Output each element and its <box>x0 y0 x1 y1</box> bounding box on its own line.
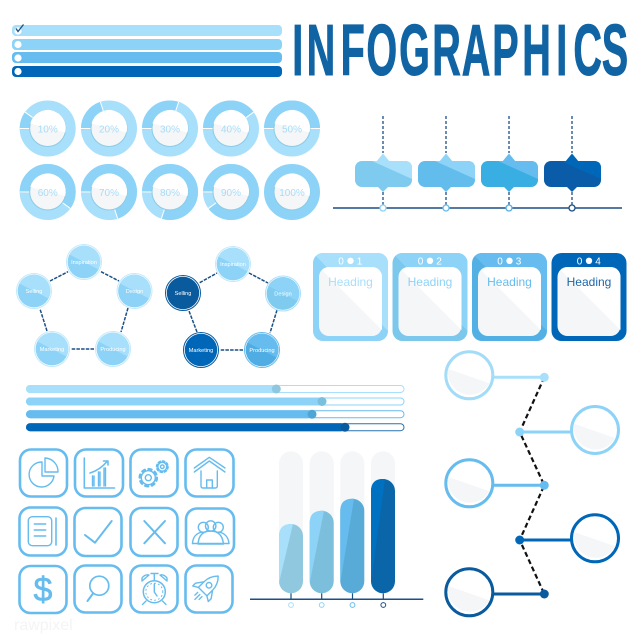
slider 2 <box>26 397 404 406</box>
donut 20% <box>81 102 132 152</box>
connectors <box>40 272 128 349</box>
milestone 3 <box>446 460 549 507</box>
card 1: Heading <box>328 275 373 289</box>
panel: cycle diagram left <box>16 244 152 366</box>
donut 10% <box>20 106 71 152</box>
timeline tag 1 <box>355 116 412 211</box>
icon: team <box>186 508 234 556</box>
card 4: Heading <box>567 275 611 289</box>
icon: rocket <box>186 566 232 612</box>
card 3: Heading <box>487 275 532 289</box>
donut 40%: 40% <box>221 124 241 135</box>
icon: pie chart <box>20 450 67 496</box>
donut 50%: 50% <box>282 124 302 135</box>
node: Selling: Selling <box>175 291 191 297</box>
donut 100%: 100% <box>279 188 305 199</box>
timeline tag 3 <box>481 116 538 211</box>
node: Producing: Producing <box>249 348 275 354</box>
node: Design: Design <box>274 292 292 298</box>
donut 80%: 80% <box>160 188 180 199</box>
donut 30% <box>142 102 193 152</box>
node: Marketing: Marketing <box>40 347 64 353</box>
card 1 <box>313 253 388 341</box>
node: Producing: Producing <box>100 347 126 353</box>
icon: gears <box>130 450 178 496</box>
card 1: 0 <box>338 256 344 267</box>
slider 1 <box>26 384 404 394</box>
timeline tag 2 <box>418 116 475 211</box>
donut 20%: 20% <box>99 124 119 135</box>
donut 50% <box>264 106 320 152</box>
title: INFOGRAPHICS <box>292 11 628 91</box>
icon: check <box>74 508 122 556</box>
card 1: 1 <box>357 256 363 267</box>
panel: heading cards <box>313 253 626 341</box>
donut 70% <box>81 169 132 219</box>
milestone 5 <box>446 569 549 616</box>
slider 3 <box>26 410 404 419</box>
icon: dollar: $ <box>34 571 53 609</box>
node: Marketing: Marketing <box>189 348 213 354</box>
donut 40% <box>203 106 254 152</box>
card 4: 0 <box>577 256 583 267</box>
watermark: rawpixel: rawpixel <box>14 617 73 634</box>
dashed zigzag path <box>520 377 544 594</box>
connectors <box>189 273 277 350</box>
donut 90%: 90% <box>221 188 241 199</box>
card 3 <box>472 253 547 341</box>
card 3: 0 <box>497 256 503 267</box>
node: Design: Design <box>126 289 143 295</box>
donut 80% <box>142 169 193 219</box>
node: Inspiration: Inspiration <box>71 260 97 266</box>
donut 30%: 30% <box>160 124 180 135</box>
card 2 <box>392 253 468 341</box>
bar 2 <box>310 451 334 607</box>
icon: magnifier <box>74 566 122 612</box>
card 4: 4 <box>595 256 601 267</box>
bar 4 <box>12 66 282 77</box>
panel: zigzag milestones <box>446 352 618 616</box>
bar 3 <box>12 52 282 63</box>
card 3: 3 <box>516 256 522 267</box>
icon: document <box>20 508 66 556</box>
panel: icon grid <box>20 450 234 613</box>
milestone 1 <box>446 352 549 399</box>
bar 2 <box>12 39 282 50</box>
slider 4 <box>26 423 404 432</box>
donut 100% <box>269 169 315 215</box>
bar 1 <box>279 451 303 607</box>
icon: dollar <box>20 566 66 613</box>
bar 4 <box>371 451 395 607</box>
icon: cross <box>130 508 178 556</box>
bar 1 with check <box>12 24 282 36</box>
icon: house <box>186 450 234 496</box>
icon: growth chart <box>75 450 123 496</box>
card 2: 2 <box>436 256 442 267</box>
donut 90% <box>203 169 254 215</box>
card 2: Heading <box>408 275 452 289</box>
bar 3 <box>340 451 364 607</box>
donut 60% <box>20 169 71 215</box>
axis <box>250 598 423 600</box>
node: Selling: Selling <box>26 289 42 295</box>
milestone 4 <box>515 515 618 562</box>
icon: alarm clock <box>130 566 178 612</box>
card 2: 0 <box>418 256 424 267</box>
panel: top checklist bars <box>12 24 282 77</box>
panel: progress sliders <box>26 384 404 432</box>
donut 10%: 10% <box>38 124 58 135</box>
timeline tag 4 <box>544 116 601 211</box>
panel: percentage donuts <box>20 102 320 219</box>
panel: cycle diagram right <box>166 246 300 368</box>
timeline axis <box>333 207 622 209</box>
card 4 <box>552 253 626 341</box>
milestone 2 <box>515 406 618 454</box>
panel: bar chart <box>250 451 423 607</box>
donut 70%: 70% <box>99 188 119 199</box>
panel: timeline with tags <box>333 116 622 211</box>
donut 60%: 60% <box>38 188 58 199</box>
node: Inspiration: Inspiration <box>220 262 246 268</box>
